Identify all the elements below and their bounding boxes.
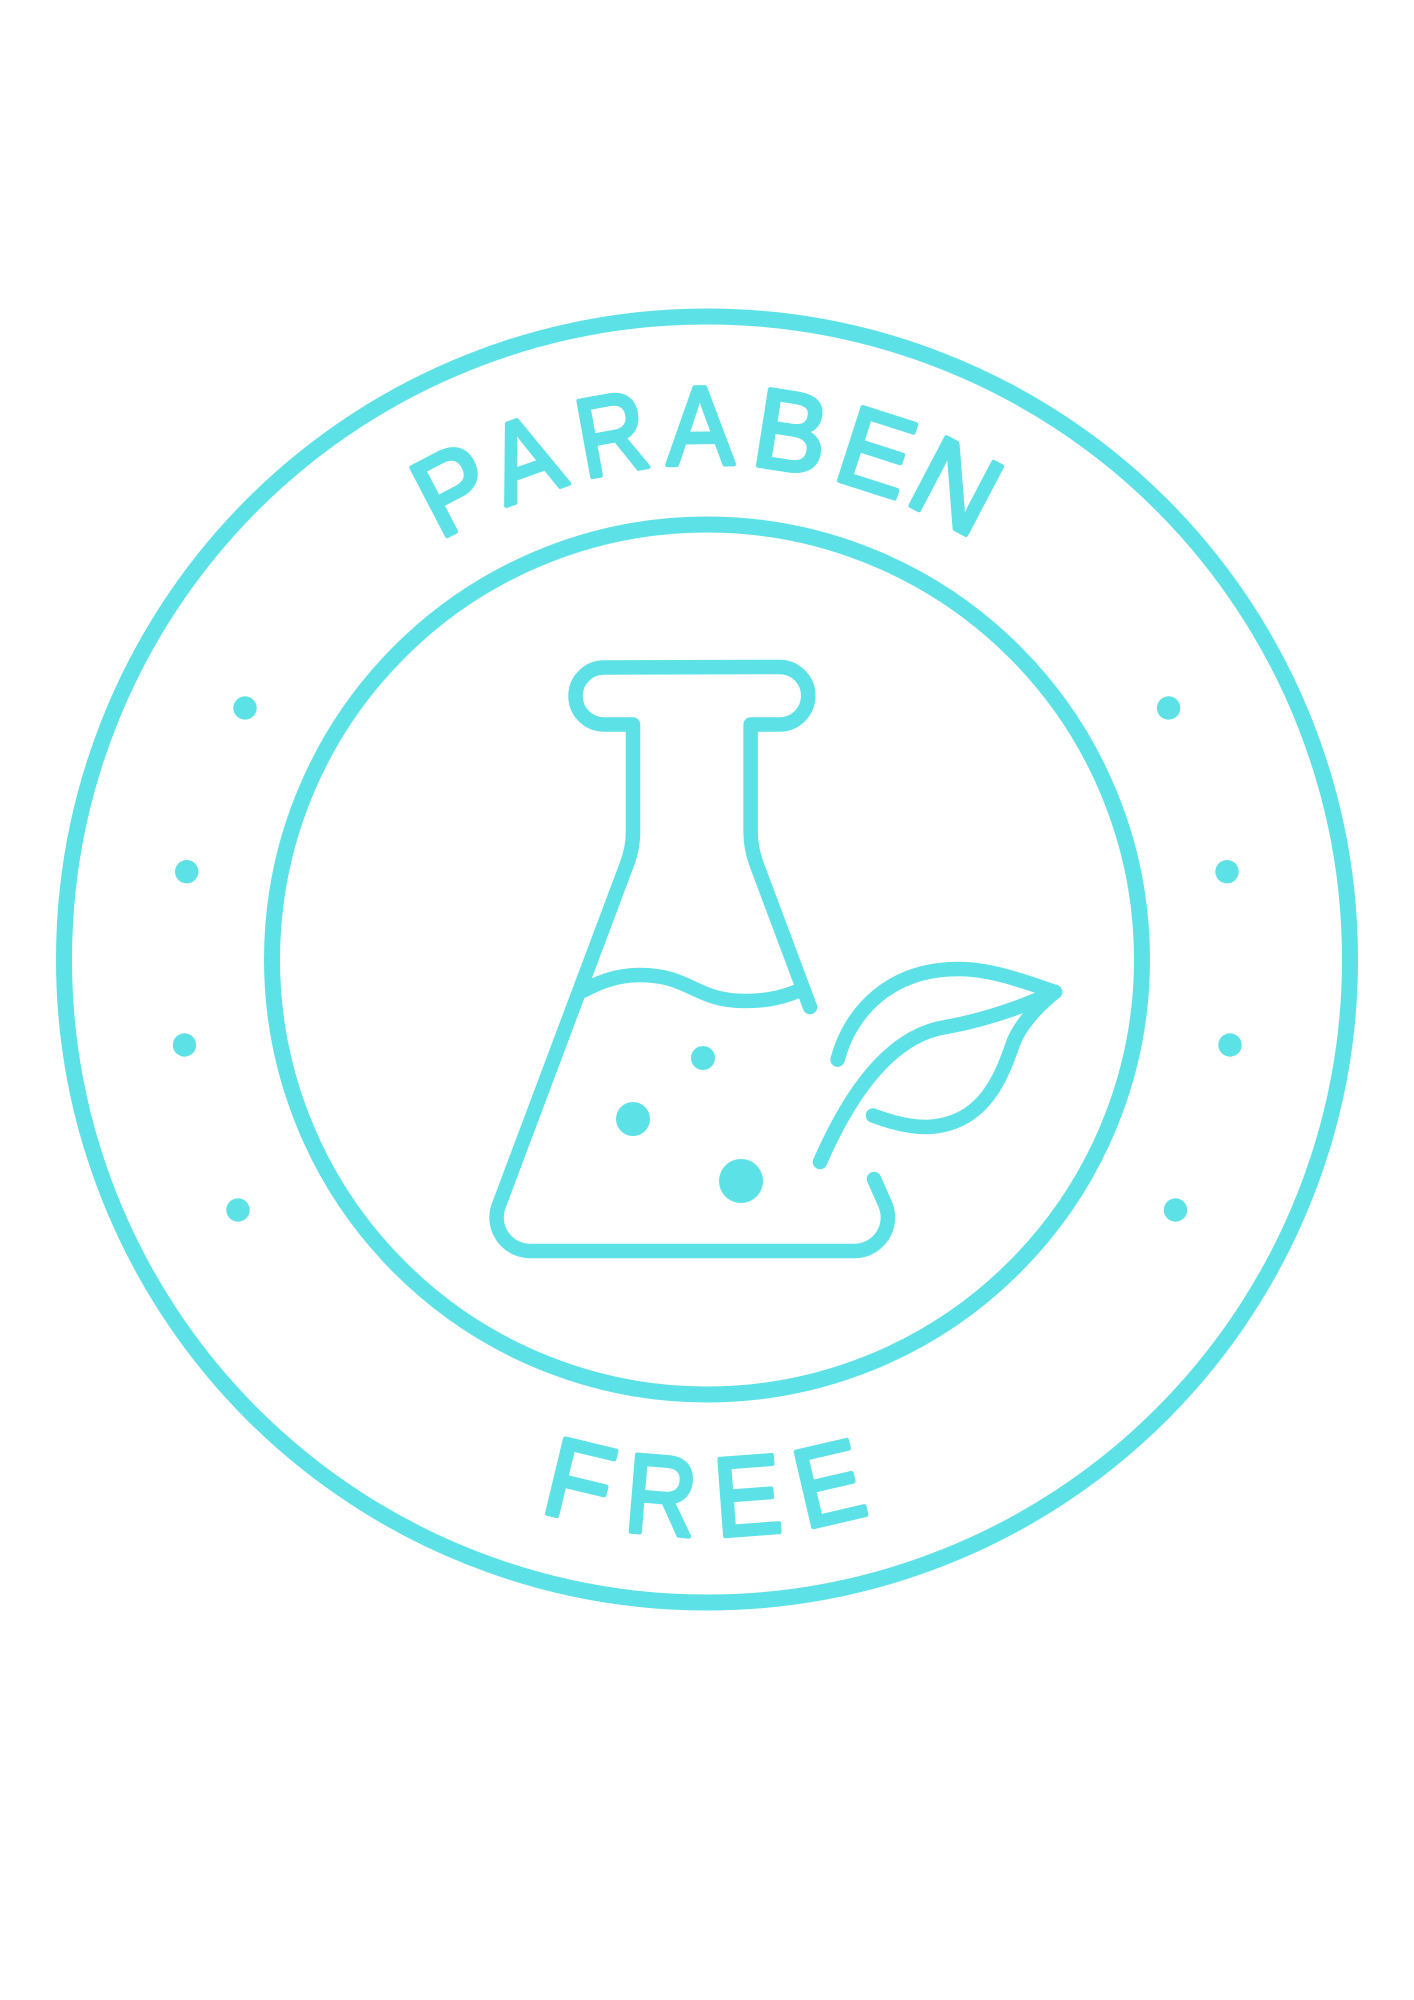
heading: PARABEN: N — [891, 412, 1021, 560]
decorative dots: left side — [173, 696, 257, 1222]
heading: PARABEN: R — [566, 367, 657, 503]
outer ring — [64, 316, 1350, 1602]
bubbles — [616, 1046, 763, 1203]
heading: FREE: E — [782, 1415, 876, 1552]
leaf lower edge — [873, 992, 1055, 1127]
liquid surface — [583, 975, 798, 1001]
heading: PARABEN: P — [393, 418, 514, 562]
heading: PARABEN: B — [746, 365, 837, 499]
heading: PARABEN: E — [823, 383, 930, 523]
leaf midrib — [820, 992, 1055, 1162]
decorative dots: right side — [1157, 696, 1242, 1222]
heading: FREE: E — [709, 1431, 786, 1561]
heading: PARABEN: A — [472, 388, 577, 529]
heading: FREE — [533, 1414, 876, 1561]
heading: PARABEN: A — [666, 363, 735, 489]
leaf upper edge — [838, 969, 1055, 1060]
heading: PARABEN — [393, 363, 1021, 562]
heading: FREE: R — [621, 1431, 702, 1561]
heading: FREE: F — [533, 1414, 626, 1551]
inner ring — [272, 524, 1142, 1394]
icon: flask with leaf — [497, 667, 1055, 1251]
flask outline — [497, 667, 888, 1251]
